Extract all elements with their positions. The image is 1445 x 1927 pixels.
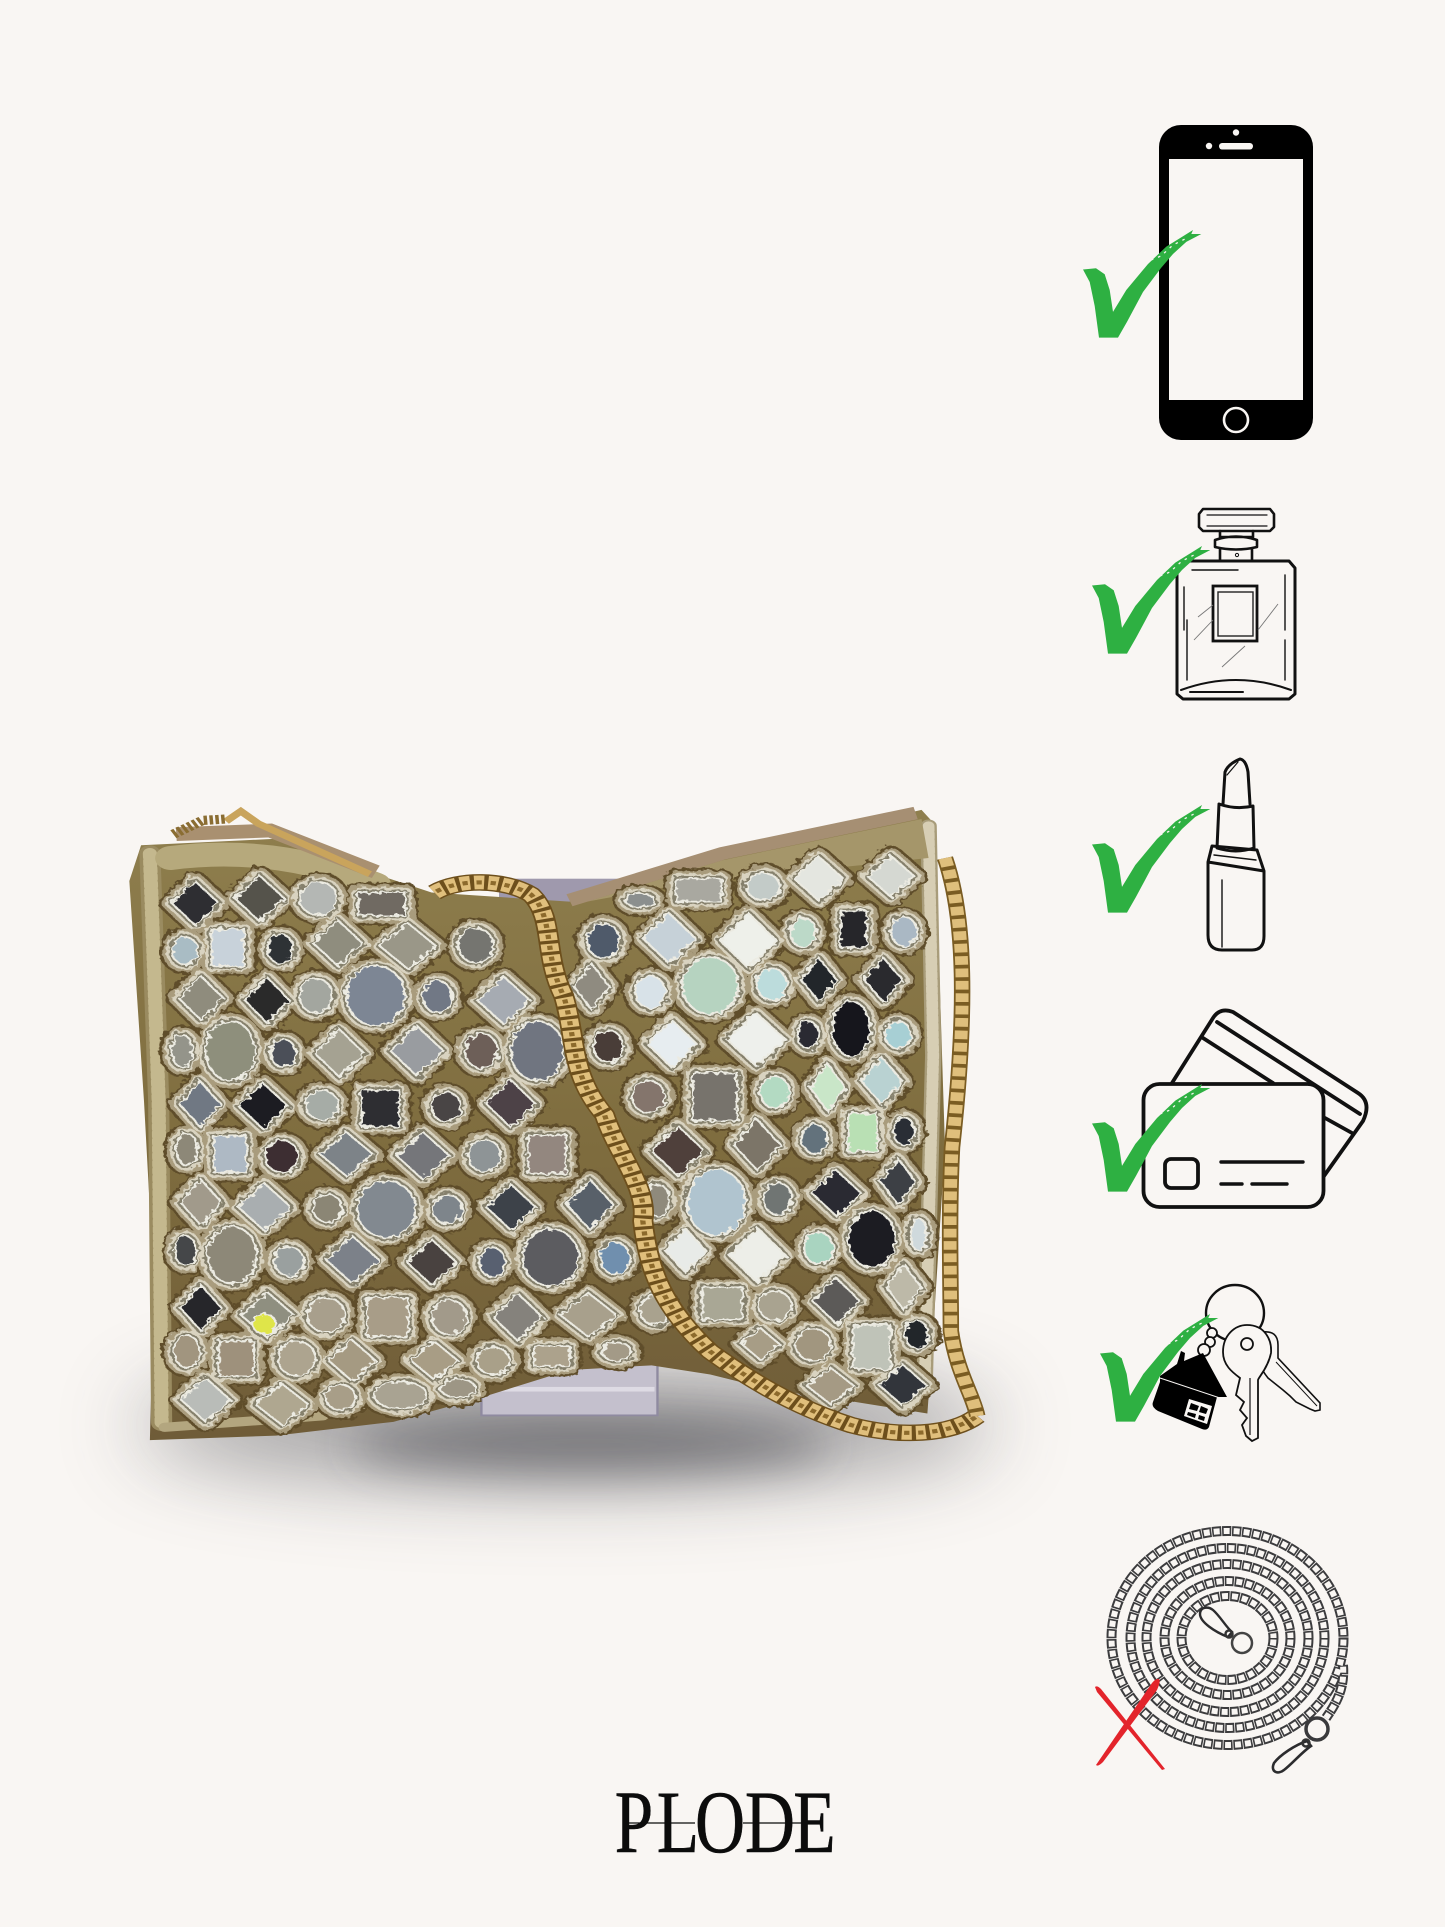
icon: lipstick [1208,759,1264,950]
acrylic stand [481,879,657,1415]
check mark: keys fit [1100,1314,1218,1422]
cross mark: chain not included [1095,1679,1165,1770]
bag body [129,810,945,1440]
check mark: phone fits [1083,230,1201,338]
side braid and top bands [150,819,933,1427]
mirror work bag photo [129,810,977,1440]
icon: credit cards [1144,1010,1367,1207]
check mark: lipstick fits [1092,805,1210,913]
icon: perfume bottle [1177,509,1295,699]
logo: PLODE: PLODE [615,1774,836,1872]
bag shadow [135,1367,995,1483]
icon: house keys [1153,1285,1320,1441]
check mark: cards fit [1092,1084,1210,1192]
icon: coiled metal chain [1112,1531,1344,1772]
icon: smartphone [1159,125,1313,440]
check mark: perfume fits [1092,546,1210,654]
zippers [173,811,916,900]
gold chain strap [434,858,977,1433]
mirrors [172,856,929,1425]
